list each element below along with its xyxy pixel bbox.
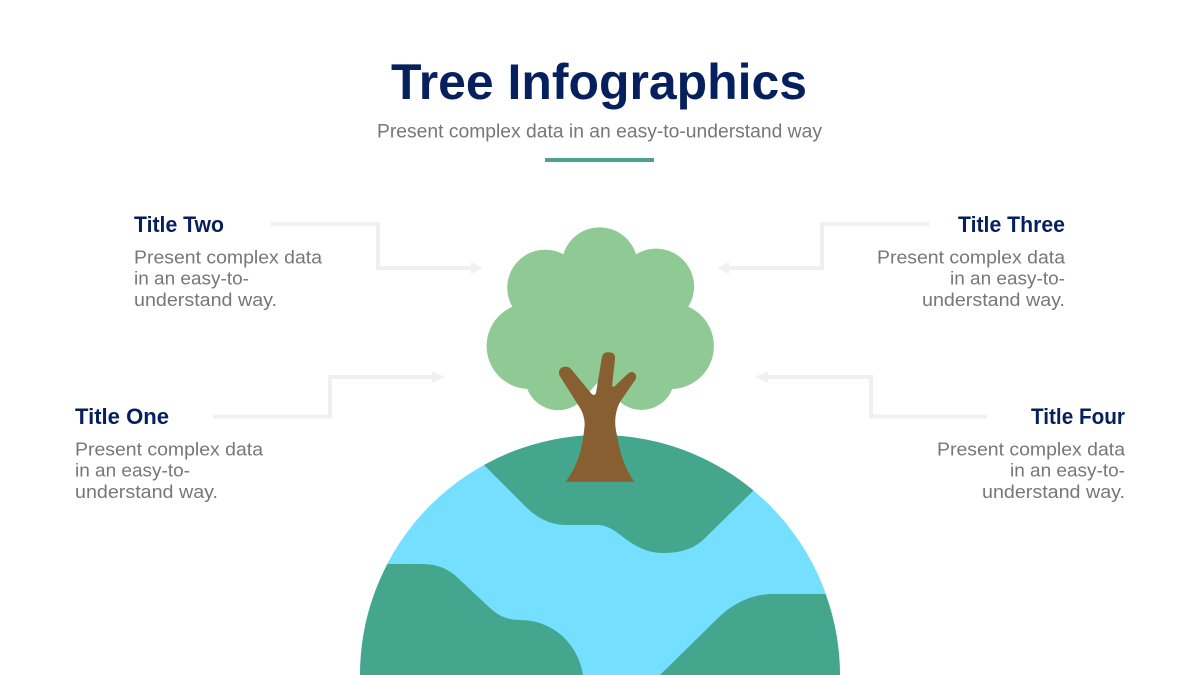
text block: title one xyxy=(75,404,264,502)
text block: title two: Present complex data xyxy=(134,248,323,268)
text block: title one: in an easy-to- xyxy=(75,460,190,480)
tree crown xyxy=(487,227,714,410)
arrow: title one to tree xyxy=(213,371,445,416)
text block: title four: Present complex data xyxy=(937,440,1126,460)
text block: title two: understand way. xyxy=(134,290,277,310)
text block: title three: Title Three xyxy=(958,212,1065,237)
ocean xyxy=(360,435,840,675)
text block: title four xyxy=(937,404,1126,502)
text block: title two: Title Two xyxy=(134,212,224,237)
tree xyxy=(487,227,714,482)
text block: title one: understand way. xyxy=(75,482,218,502)
subtitle: Present complex data in an easy-to-understand way xyxy=(377,122,822,142)
text block: title three: in an easy-to- xyxy=(950,268,1065,288)
arrow: title three to tree xyxy=(717,224,929,274)
text block: title two: in an easy-to- xyxy=(134,268,249,288)
text block: title four: Title Four xyxy=(1031,404,1125,429)
text block: title three xyxy=(877,212,1066,310)
text block: title four: understand way. xyxy=(982,482,1125,502)
text block: title one: Title One xyxy=(75,404,169,429)
text block: title three: understand way. xyxy=(922,290,1065,310)
arrow: title two to tree xyxy=(271,224,483,274)
text block: title three: Present complex data xyxy=(877,248,1066,268)
globe xyxy=(360,435,840,675)
arrow: title four to tree xyxy=(755,371,987,416)
title underline accent xyxy=(545,158,654,162)
text block: title one: Present complex data xyxy=(75,440,264,460)
title: Tree Infographics xyxy=(391,54,807,110)
continents xyxy=(360,435,840,675)
text block: title two xyxy=(134,212,323,310)
tree trunk xyxy=(559,352,636,482)
text block: title four: in an easy-to- xyxy=(1010,460,1125,480)
